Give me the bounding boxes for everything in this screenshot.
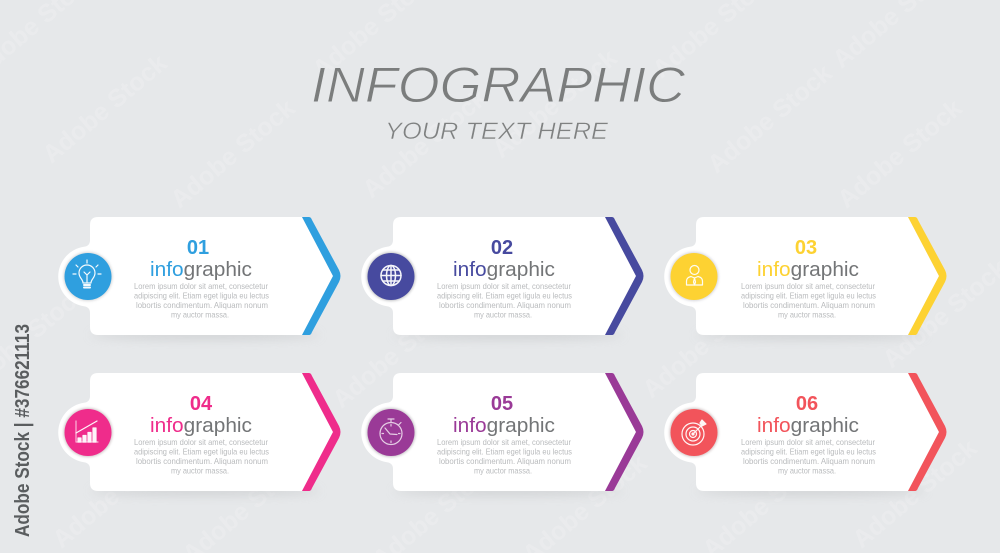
title: INFOGRAPHIC (311, 57, 686, 113)
text block: adipiscing elit. Etiam eget ligula eu lectus (134, 290, 269, 300)
stock id side label: Adobe Stock | #376621113 (12, 324, 34, 537)
text block (741, 437, 876, 476)
heading: infographic (453, 259, 555, 281)
watermark pattern: Adobe Stock (832, 94, 967, 214)
panel: card 03 (664, 217, 946, 339)
icon: bar chart (76, 421, 98, 442)
watermark pattern: Adobe Stock (327, 294, 462, 414)
text block: lobortis condimentum. Aliquam nonum (439, 300, 571, 310)
text block: my auctor massa. (171, 310, 229, 320)
text block: Lorem ipsum dolor sit amet, consectetur (437, 437, 571, 447)
number: 01 (187, 237, 209, 259)
heading: infographic (757, 415, 859, 437)
panel: card 02 (361, 217, 644, 339)
heading: infographic (150, 259, 252, 281)
text block: lobortis condimentum. Aliquam nonum (136, 456, 268, 466)
text block: my auctor massa. (778, 310, 836, 320)
watermark pattern: Adobe Stock (357, 84, 492, 204)
number: 03 (795, 237, 817, 259)
text block: lobortis condimentum. Aliquam nonum (743, 456, 875, 466)
watermark pattern: Adobe Stock (47, 434, 182, 553)
text block: my auctor massa. (171, 466, 229, 476)
icon: light bulb (73, 260, 101, 288)
text block: Lorem ipsum dolor sit amet, consectetur (134, 281, 268, 291)
number: 04 (190, 393, 213, 415)
text block: adipiscing elit. Etiam eget ligula eu lectus (741, 446, 876, 456)
text block: adipiscing elit. Etiam eget ligula eu lectus (437, 446, 572, 456)
watermark pattern: Adobe Stock (637, 284, 772, 404)
number: 02 (491, 237, 513, 259)
icon: stopwatch (380, 419, 402, 444)
icon: person (686, 266, 702, 285)
subtitle: YOUR TEXT HERE (385, 118, 609, 145)
text block: lobortis condimentum. Aliquam nonum (136, 300, 268, 310)
text block (437, 437, 572, 476)
icon: target (682, 420, 706, 445)
panel: card 05 (361, 373, 644, 495)
watermark pattern: Adobe Stock (702, 59, 837, 179)
text block: Lorem ipsum dolor sit amet, consectetur (741, 437, 875, 447)
text block: Lorem ipsum dolor sit amet, consectetur (134, 437, 268, 447)
text block: adipiscing elit. Etiam eget ligula eu lectus (437, 290, 572, 300)
text block: adipiscing elit. Etiam eget ligula eu lectus (134, 446, 269, 456)
text block: my auctor massa. (778, 466, 836, 476)
text block (437, 281, 572, 320)
panel: card 06 (664, 373, 946, 495)
text block (741, 281, 876, 320)
number: 06 (796, 393, 818, 415)
text block: Lorem ipsum dolor sit amet, consectetur (437, 281, 571, 291)
text block: my auctor massa. (474, 310, 532, 320)
heading: infographic (757, 259, 859, 281)
text block (134, 281, 269, 320)
heading: infographic (453, 415, 555, 437)
text block: lobortis condimentum. Aliquam nonum (439, 456, 571, 466)
heading: infographic (150, 415, 252, 437)
panel: card 04 (58, 373, 341, 495)
watermark pattern: Adobe Stock (487, 44, 622, 164)
text block (134, 437, 269, 476)
icon: globe (381, 266, 401, 286)
watermark pattern: Adobe Stock (847, 434, 982, 553)
watermark pattern: Adobe Stock (165, 94, 300, 214)
panel: card 01 (58, 217, 341, 339)
text block: adipiscing elit. Etiam eget ligula eu lectus (741, 290, 876, 300)
watermark pattern: Adobe Stock (37, 49, 172, 169)
number: 05 (491, 393, 513, 415)
text block: lobortis condimentum. Aliquam nonum (743, 300, 875, 310)
text block: my auctor massa. (474, 466, 532, 476)
text block: Lorem ipsum dolor sit amet, consectetur (741, 281, 875, 291)
